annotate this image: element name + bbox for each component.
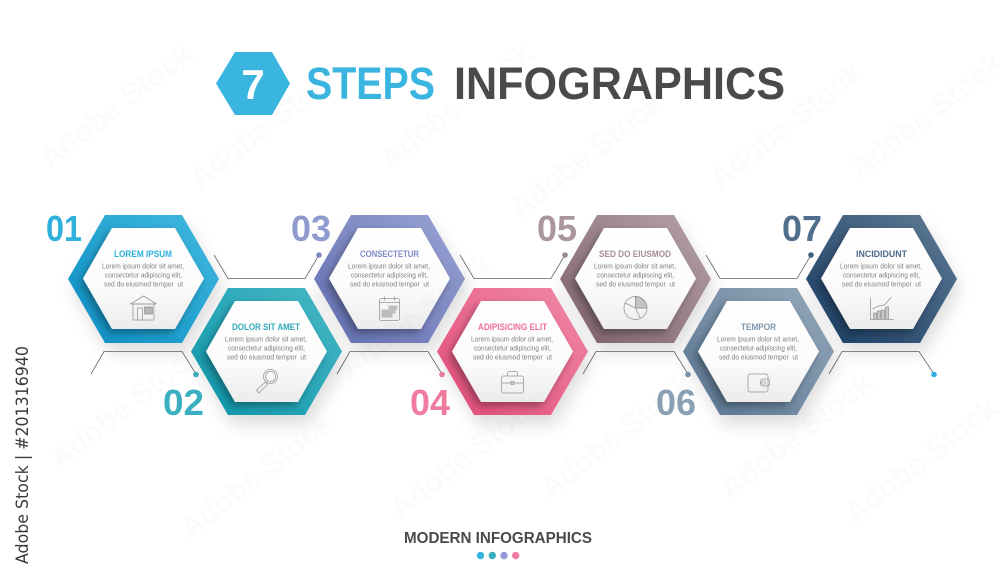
heading: steps: STEPS <box>306 58 435 109</box>
panel: step 04 <box>410 288 588 423</box>
text block: sed do eiusmod tempor ut <box>350 280 430 288</box>
text block: sed do eiusmod tempor ut <box>842 280 922 288</box>
watermark: Adobe Stock <box>174 406 339 546</box>
text block: sed do eiusmod tempor ut <box>596 280 676 288</box>
panel: step 05 <box>537 208 711 343</box>
heading: incididunt: INCIDIDUNT <box>856 249 907 259</box>
text block: sed do eiusmod tempor ut <box>719 352 799 362</box>
heading: tempor: TEMPOR <box>741 322 776 332</box>
text block <box>225 334 307 362</box>
number 07: 07 <box>782 208 822 249</box>
stock credit: Adobe Stock | #201316940 <box>13 346 33 564</box>
watermark: Adobe Stock <box>714 366 879 506</box>
heading: lorem ipsum: LOREM IPSUM <box>114 249 172 259</box>
heading: infographics: INFOGRAPHICS <box>454 58 785 109</box>
icon: wallet <box>748 374 770 392</box>
heading: consectetur: CONSECTETUR <box>360 249 419 259</box>
text block: Lorem ipsum dolor sit amet, <box>102 262 184 270</box>
text block: consectetur adipiscing elit, <box>843 270 920 280</box>
text block <box>102 262 184 288</box>
icon: number 7 hexagon <box>216 52 290 115</box>
watermark: Adobe Stock <box>44 336 209 476</box>
watermark: Adobe Stock <box>504 86 669 226</box>
heading: adipisicing elit: ADIPISICING ELIT <box>478 322 547 332</box>
footer heading: MODERN INFOGRAPHICS <box>404 530 592 547</box>
text block: Lorem ipsum dolor sit amet, <box>594 262 676 270</box>
text block: consectetur adipiscing elit, <box>228 344 305 352</box>
text block: consectetur adipiscing elit, <box>351 270 428 280</box>
watermark: Adobe Stock <box>334 246 499 386</box>
title <box>216 52 785 115</box>
text block: sed do eiusmod tempor ut <box>104 280 184 288</box>
watermark: Adobe Stock <box>374 36 539 176</box>
panel: step 03 <box>291 208 465 343</box>
text block <box>840 262 922 288</box>
heading: dolor sit amet: DOLOR SIT AMET <box>232 322 300 332</box>
connector lines <box>91 252 937 377</box>
icon: number 7 hexagon: 7 <box>241 61 265 108</box>
text block: Lorem ipsum dolor sit amet, <box>471 334 553 344</box>
text block: consectetur adipiscing elit, <box>474 344 551 352</box>
panel: step 07 <box>782 208 957 343</box>
panel: step 01 <box>46 208 219 343</box>
watermark: Adobe Stock <box>704 56 869 196</box>
number 06: 06 <box>656 382 696 423</box>
text block: consectetur adipiscing elit, <box>105 270 182 280</box>
icon: magnifier <box>256 370 278 393</box>
number 02: 02 <box>163 382 204 423</box>
watermark: Adobe Stock <box>534 366 699 506</box>
footer dots <box>477 552 519 559</box>
text block: Lorem ipsum dolor sit amet, <box>225 334 307 344</box>
icon: calendar <box>380 296 400 320</box>
text block: Lorem ipsum dolor sit amet, <box>840 262 922 270</box>
text block: consectetur adipiscing elit, <box>597 270 674 280</box>
panel: step 06 <box>656 288 834 423</box>
icon: briefcase <box>502 372 524 393</box>
number 01: 01 <box>46 208 82 249</box>
text block <box>348 262 430 288</box>
watermark: Adobe Stock <box>184 56 349 196</box>
watermark: Adobe Stock <box>34 36 199 176</box>
panel: step 02 <box>163 288 342 423</box>
text block: sed do eiusmod tempor ut <box>473 352 553 362</box>
text block: Lorem ipsum dolor sit amet, <box>717 334 799 344</box>
text block <box>594 262 676 288</box>
number 05: 05 <box>537 208 577 249</box>
icon: growth chart <box>870 297 894 320</box>
text block: Lorem ipsum dolor sit amet, <box>348 262 430 270</box>
text block <box>471 334 553 362</box>
number 04: 04 <box>410 382 450 423</box>
text block <box>717 334 799 362</box>
watermark: Adobe Stock <box>384 386 549 526</box>
heading: sed do eiusmod: SED DO EIUSMOD <box>599 249 671 259</box>
text block: sed do eiusmod tempor ut <box>227 352 307 362</box>
text block: consectetur adipiscing elit, <box>720 344 797 352</box>
icon: house <box>130 296 156 320</box>
watermark: Adobe Stock <box>839 391 1000 531</box>
number 03: 03 <box>291 208 331 249</box>
icon: pie chart <box>624 296 647 320</box>
